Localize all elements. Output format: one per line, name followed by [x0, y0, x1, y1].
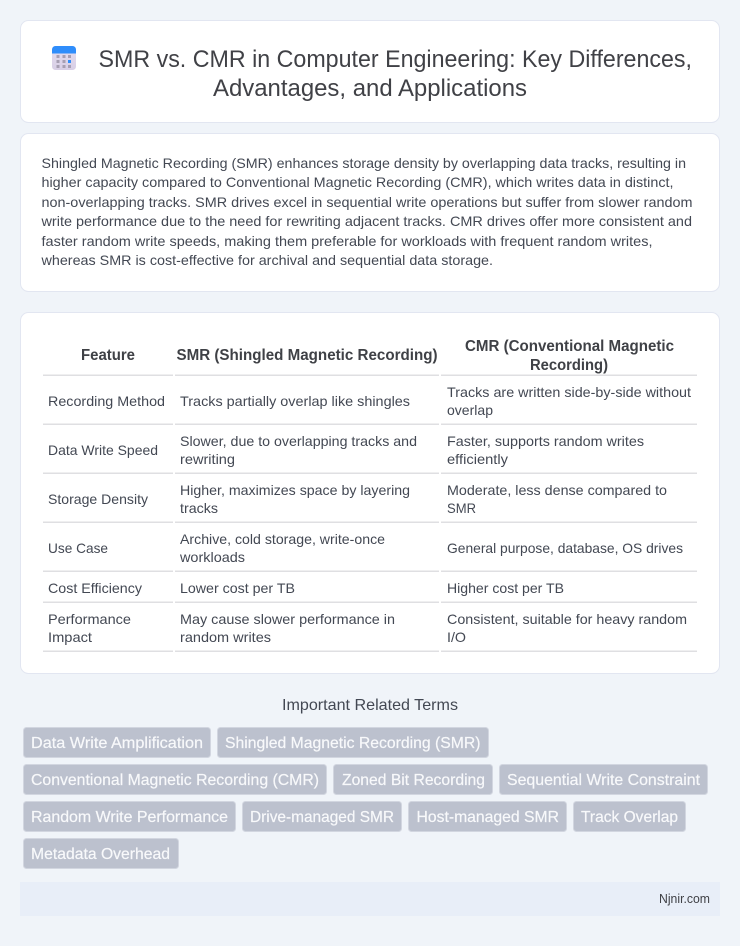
- row: use case: Archive, cold storage, write-once: [180, 531, 385, 547]
- tag: Conventional Magnetic Recording (CMR): [31, 772, 319, 789]
- row: data write speed: rewriting: [180, 451, 235, 467]
- tag: [242, 802, 402, 832]
- row: recording method: overlap: [447, 402, 493, 418]
- footer: Njnir.com: [659, 891, 710, 906]
- row: recording method: [43, 384, 697, 425]
- text block: description: write performance due to the need for rewriting adjacent tracks. CMR drives offer more consistent and: [40, 213, 692, 229]
- row: performance impact: [43, 611, 697, 652]
- table header: Recording): [530, 357, 608, 374]
- tag: Random Write Performance: [31, 809, 228, 826]
- row: data write speed: Data Write Speed: [48, 442, 158, 458]
- row: data write speed: [43, 433, 697, 474]
- row: performance impact: Consistent, suitable for heavy random: [447, 611, 687, 627]
- tag: Track Overlap: [581, 809, 678, 826]
- tag: Metadata Overhead: [31, 846, 170, 863]
- row: use case: General purpose, database, OS drives: [447, 540, 683, 556]
- icon: calendar: [52, 46, 76, 70]
- text block: description: Shingled Magnetic Recording (SMR) enhances storage density by overlapping data tracks, resulting in: [42, 155, 686, 171]
- panel: description: [20, 134, 720, 292]
- row: recording method: Tracks partially overlap like shingles: [180, 393, 410, 409]
- panel: title header: [20, 20, 720, 122]
- tag: [24, 728, 210, 758]
- table header: CMR (Conventional Magnetic: [465, 338, 674, 355]
- text block: description: faster random write speeds, making them preferable for workloads with frequent random writes,: [42, 233, 652, 249]
- row: performance impact: May cause slower performance in: [180, 611, 395, 627]
- row: data write speed: Faster, supports random writes: [447, 433, 644, 449]
- row: use case: Use Case: [48, 540, 108, 556]
- row: recording method: Tracks are written side-by-side without: [447, 384, 691, 400]
- title: SMR vs. CMR in Computer Engineering: Key Differences,: [98, 46, 692, 73]
- row: cost efficiency: Lower cost per TB: [180, 580, 295, 596]
- row: storage density: SMR: [447, 500, 476, 516]
- text block: description: non-overlapping tracks. SMR drives excel in sequential write operations but suffer from slower random: [42, 194, 692, 210]
- row: use case: [43, 531, 697, 572]
- tag: [408, 802, 566, 832]
- row: storage density: Higher, maximizes space by layering: [180, 482, 410, 498]
- row: storage density: [43, 482, 697, 523]
- row: performance impact: Impact: [48, 629, 92, 645]
- row: data write speed: efficiently: [447, 451, 508, 467]
- text block: description: whereas SMR is cost-effective for archival and sequential data storage.: [40, 252, 493, 268]
- tag: [218, 728, 488, 758]
- row: performance impact: I/O: [447, 629, 466, 645]
- tag: [334, 764, 492, 794]
- row: recording method: Recording Method: [48, 393, 165, 409]
- tag: [500, 764, 708, 794]
- row: storage density: tracks: [180, 500, 218, 516]
- text block: description: higher capacity compared to Conventional Magnetic Recording (CMR), which writes data in distinct,: [42, 174, 674, 190]
- title: Advantages, and Applications: [213, 75, 527, 102]
- text block: description: [40, 155, 693, 268]
- table header: SMR (Shingled Magnetic Recording): [176, 347, 438, 364]
- row: cost efficiency: Higher cost per TB: [447, 580, 564, 596]
- panel: comparison table: [20, 312, 720, 674]
- tag: [24, 838, 178, 868]
- row: performance impact: random writes: [180, 629, 271, 645]
- row: use case: workloads: [179, 549, 245, 565]
- tag: Host-managed SMR: [416, 809, 559, 826]
- tag: [24, 802, 236, 832]
- tag: Sequential Write Constraint: [507, 772, 701, 789]
- tag: Zoned Bit Recording: [342, 772, 485, 789]
- footer: [20, 882, 720, 916]
- table header: Feature: [81, 347, 135, 364]
- tag: Shingled Magnetic Recording (SMR): [225, 735, 480, 752]
- row: storage density: Storage Density: [48, 491, 148, 507]
- tag: [574, 802, 686, 832]
- tag: [24, 764, 326, 794]
- table header: [43, 338, 697, 376]
- tag: Drive-managed SMR: [250, 809, 394, 826]
- row: cost efficiency: [43, 580, 697, 603]
- row: cost efficiency: Cost Efficiency: [48, 580, 142, 596]
- title: [98, 46, 692, 102]
- row: data write speed: Slower, due to overlapping tracks and: [180, 433, 417, 449]
- panel: related term tags: [24, 728, 708, 868]
- row: performance impact: Performance: [48, 611, 131, 627]
- row: storage density: Moderate, less dense compared to: [447, 482, 667, 498]
- tag: Data Write Amplification: [31, 735, 203, 752]
- heading: important related terms: Important Related Terms: [282, 697, 458, 714]
